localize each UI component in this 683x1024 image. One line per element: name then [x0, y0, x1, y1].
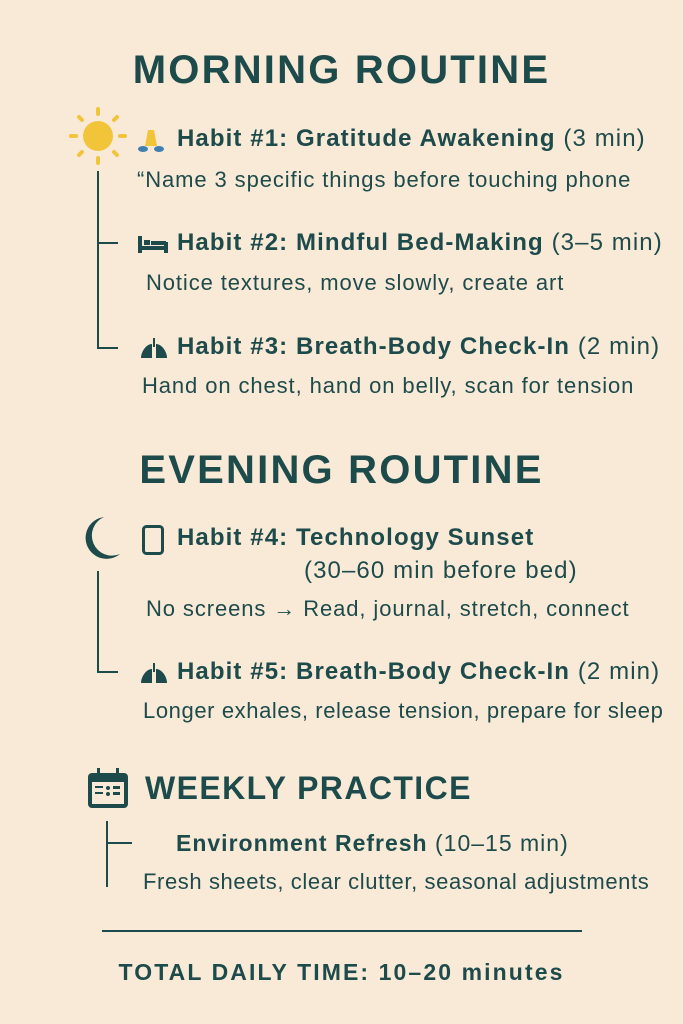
- body 3: Hand on chest, hand on belly, scan for tension: [142, 373, 634, 398]
- connector: evening: [97, 571, 99, 673]
- text: Habit #1: Gratitude Awakening (3 min): [177, 125, 646, 152]
- habit 4: [142, 524, 578, 584]
- body 2: Notice textures, move slowly, create art: [146, 270, 564, 295]
- body 4: No screens → Read, journal, stretch, connect: [146, 596, 629, 621]
- connector: morning: [97, 171, 99, 349]
- title: weekly practice: WEEKLY PRACTICE: [145, 770, 472, 806]
- icon: phone: [142, 525, 164, 555]
- habit 4: Habit #4: Technology Sunset: [177, 524, 534, 551]
- habit 3: [141, 333, 660, 360]
- total daily time: TOTAL DAILY TIME: 10–20 minutes: [118, 959, 564, 985]
- environment refresh heading: Environment Refresh (10–15 min): [176, 830, 569, 856]
- connector: weekly: [106, 821, 108, 887]
- body 1: “Name 3 specific things before touching phone: [137, 167, 631, 192]
- text: Habit #5: Breath-Body Check-In (2 min): [177, 658, 660, 685]
- text: Habit #2: Mindful Bed-Making (3–5 min): [177, 229, 663, 256]
- icon: praying hands: [138, 130, 164, 152]
- icon: moon: [86, 517, 120, 559]
- title: evening routine: EVENING ROUTINE: [139, 448, 544, 492]
- habit 4: (30–60 min before bed): [304, 557, 578, 584]
- body weekly: Fresh sheets, clear clutter, seasonal adjustments: [143, 869, 649, 894]
- habit 5: [141, 658, 660, 685]
- body 5: Longer exhales, release tension, prepare for sleep: [143, 698, 663, 723]
- icon: lungs: [141, 663, 167, 683]
- icon: sun: [69, 107, 127, 165]
- icon: lungs: [141, 338, 167, 358]
- title: morning routine: MORNING ROUTINE: [133, 48, 550, 92]
- icon: calendar: [88, 768, 128, 808]
- habit 2: [138, 229, 663, 256]
- icon: bed: [138, 236, 168, 253]
- habit 1: [138, 125, 646, 152]
- text: Habit #3: Breath-Body Check-In (2 min): [177, 333, 660, 360]
